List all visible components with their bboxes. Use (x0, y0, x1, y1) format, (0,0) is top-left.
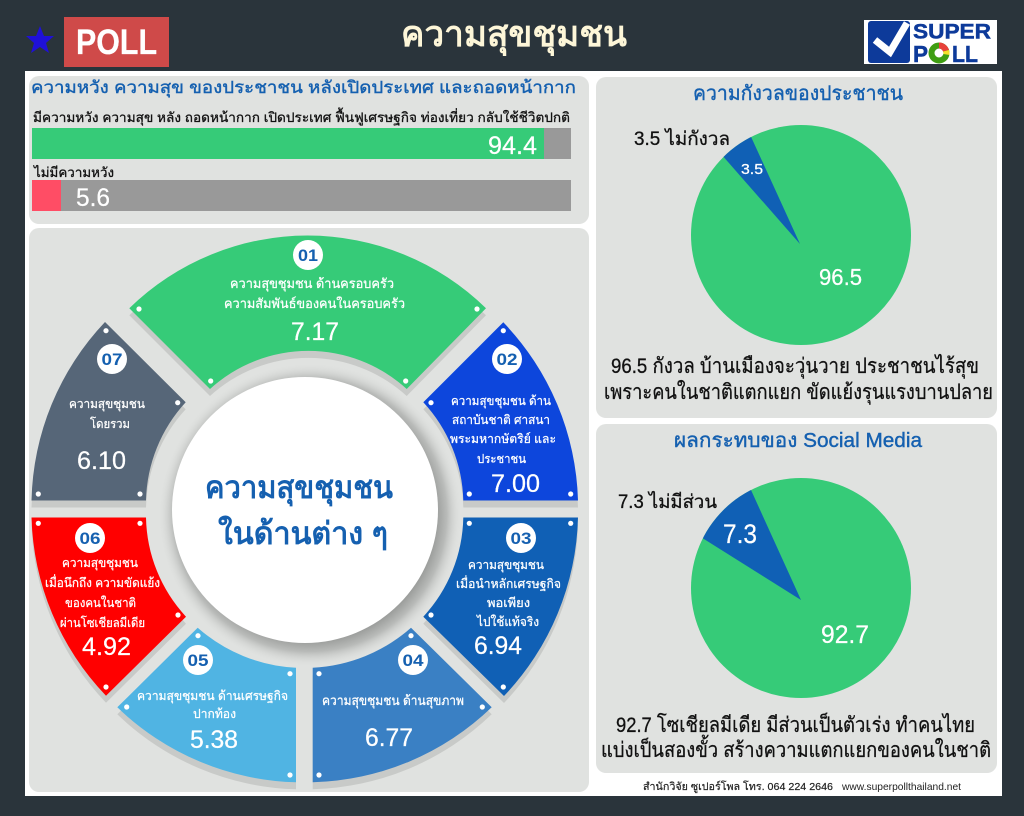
segment 02 nation religion monarchy: 02 (496, 351, 518, 369)
worry description: 96.5 กังวล บ้านเมืองจะวุ่นวาย ประชาชนไร้สุข (611, 354, 979, 379)
segment 03 sufficiency economy: 03 (510, 530, 532, 548)
segment 01 family: 01 (298, 247, 318, 265)
bar: no hope 5.6: 5.6 (76, 184, 110, 212)
segment 05 economy: 05 (188, 652, 208, 670)
centre circle (158, 363, 462, 667)
segment 07 overall: ความสุขชุมชน (69, 397, 145, 412)
pie label: no part: 7.3 ไม่มีส่วน (618, 491, 717, 513)
pie label: not worried: 3.5 ไม่กังวล (634, 128, 730, 150)
segment 03 sufficiency economy: เมื่อนำหลักเศรษฐกิจ (456, 575, 561, 591)
segment 07 overall: 07 (102, 351, 122, 369)
no hope label: ไม่มีความหวัง (33, 165, 114, 180)
segment 02 nation religion monarchy: พระมหากษัตริย์ และ (450, 432, 556, 446)
footer credit: สำนักวิจัย ซูเปอร์โพล โทร. 064 224 2646 (643, 780, 833, 793)
panel heading: ผลกระทบของ Social Media (674, 430, 923, 452)
pie chart: worry: 3.5 (741, 161, 763, 178)
segment 03 sufficiency economy (423, 518, 578, 703)
panel: hope and happiness (29, 76, 589, 224)
segment 06 social media conflict: ผ่านโซเชียลมีเดีย (60, 615, 145, 630)
pie chart: worry: 96.5 (819, 264, 862, 290)
segment 02 nation religion monarchy (423, 322, 578, 508)
segment 03 sufficiency economy: 6.94 (474, 632, 522, 660)
pie chart: social media: 92.7 (821, 621, 869, 649)
panel heading: ความกังวลของประชาชน (693, 83, 903, 105)
icon: star (26, 26, 54, 53)
segment 04 health: 6.77 (365, 724, 413, 752)
segment 05 economy (117, 628, 296, 789)
SUPER POLL logo: SUPER (913, 20, 991, 44)
segment 06 social media conflict: ของคนในชาติ (65, 596, 136, 610)
segment 06 social media conflict: 4.92 (82, 633, 131, 661)
centre circle: ความสุขชุมชน (205, 470, 393, 507)
segment 06 social media conflict: 06 (80, 530, 100, 548)
POLL badge: POLL (76, 23, 157, 62)
segment 07 overall (32, 322, 186, 508)
social media description: 92.7 โซเชียลมีเดีย มีส่วนเป็นตัวเร่ง ทำคนไทย (616, 711, 975, 737)
panel: worry (596, 77, 997, 418)
panel: social media impact (596, 424, 997, 773)
segment 02 nation religion monarchy: ความสุขชุมชน ด้าน (451, 394, 551, 409)
segment 05 economy: ความสุขชุมชน ด้านเศรษฐกิจ (137, 689, 288, 704)
segment 02 nation religion monarchy: 7.00 (491, 470, 540, 498)
segment 02 nation religion monarchy: สถาบันชาติ ศาสนา (452, 413, 550, 427)
panel: community happiness ring (29, 228, 589, 792)
segment 06 social media conflict: ความสุขชุมชน (62, 556, 138, 571)
bar: hope 94.4: 94.4 (488, 132, 537, 160)
SUPER POLL logo: P (913, 41, 928, 67)
pie chart: social media (680, 468, 911, 698)
bar: hope 94.4 (32, 128, 571, 160)
pie chart: social media: 7.3 (723, 519, 757, 549)
segment 04 health: ความสุขชุมชน ด้านสุขภาพ (322, 693, 464, 709)
segment 01 family: 7.17 (291, 318, 339, 346)
segment 03 sufficiency economy: ไปใช้แท้จริง (476, 615, 539, 629)
segment 06 social media conflict: เมื่อนึกถึง ความขัดแย้ง (45, 574, 160, 590)
segment 01 family (129, 236, 486, 396)
footer credit (643, 780, 961, 793)
segment 02 nation religion monarchy: ประชาชน (477, 452, 526, 466)
footer credit: www.superpollthailand.net (841, 781, 961, 793)
social media description (601, 711, 991, 762)
segment 04 health (313, 628, 492, 789)
POLL badge (64, 17, 169, 67)
segment 01 family: ความสัมพันธ์ของคนในครอบครัว (224, 296, 405, 311)
worry description (604, 354, 993, 405)
segment 04 health: 04 (402, 652, 424, 670)
segment 05 economy: 5.38 (190, 726, 238, 754)
segment 03 sufficiency economy: พอเพียง (487, 596, 530, 610)
panel heading: ความหวัง ความสุข ของประชาชน หลังเปิดประเทศ และถอดหน้ากาก (31, 78, 576, 98)
centre circle: ในด้านต่าง ๆ (218, 515, 388, 551)
pie chart: worry (691, 117, 911, 345)
segment 07 overall: 6.10 (77, 447, 126, 475)
bar: no hope 5.6 (32, 180, 571, 212)
segment 03 sufficiency economy: ความสุขชุมชน (468, 558, 544, 573)
SUPER POLL logo: LL (952, 41, 978, 67)
segment 05 economy: ปากท้อง (193, 707, 236, 721)
segment 01 family: ความสุขชุมชน ด้านครอบครัว (230, 276, 394, 292)
hope label: มีความหวัง ความสุข หลัง ถอดหน้ากาก เปิดประเทศ ฟื้นฟูเศรษฐกิจ ท่องเที่ยว กลับใช้ชีวิตปกติ (33, 107, 570, 126)
segment 06 social media conflict (32, 518, 186, 703)
SUPER POLL logo (864, 20, 997, 67)
title: ความสุขชุมชน (401, 13, 627, 57)
segment 07 overall: โดยรวม (90, 416, 130, 431)
